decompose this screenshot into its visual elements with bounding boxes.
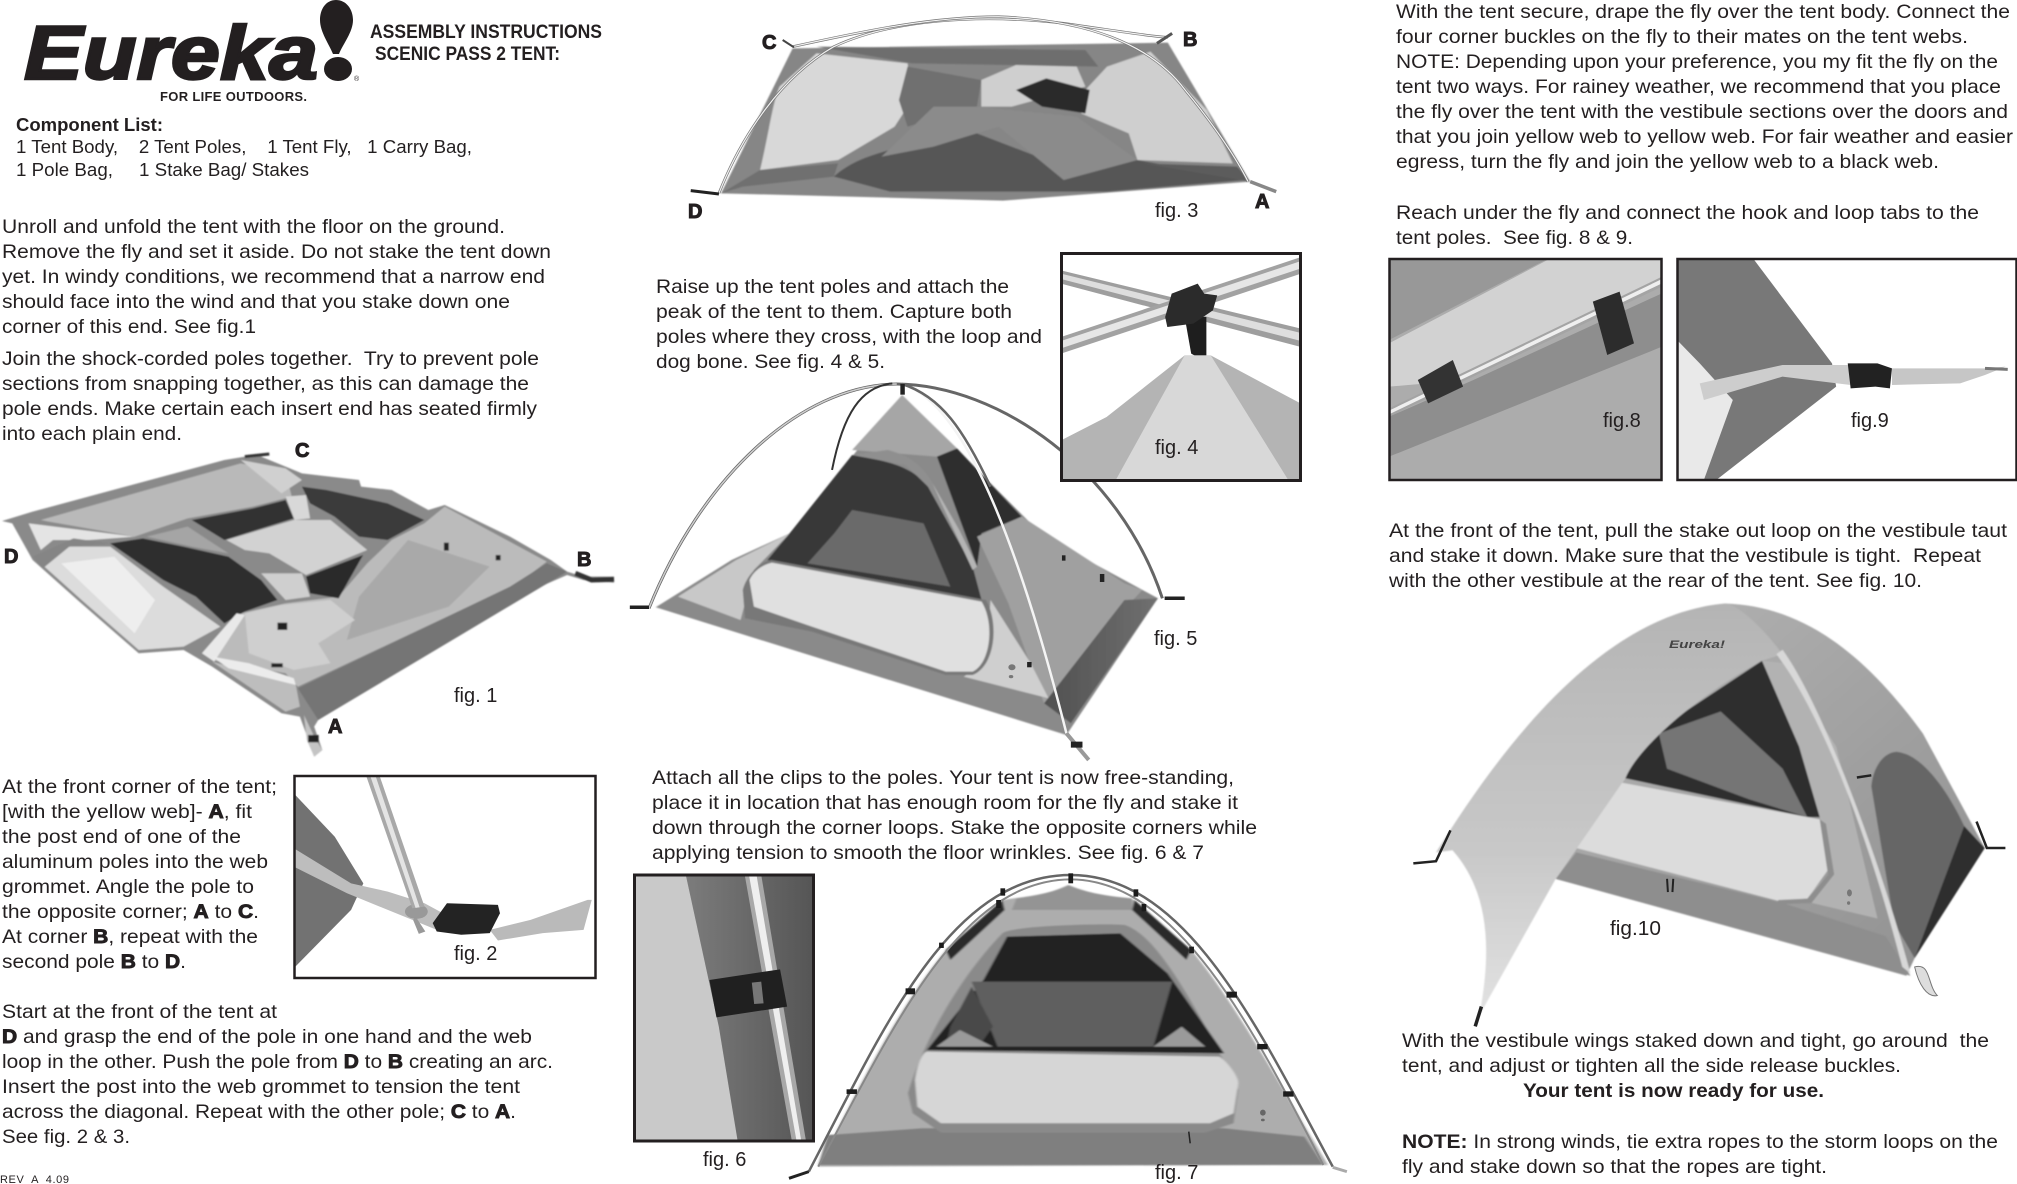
figure 3 corner labels: C — [762, 32, 776, 54]
text: raise up the tent poles: peak of the tent to them. Capture both — [656, 301, 1012, 323]
text: raise up the tent poles: poles where they cross, with the loop and — [656, 326, 1042, 348]
text: vestibule wings: tent, and adjust or tighten all the side release buckles. — [1402, 1055, 1901, 1077]
text: start at the front of the tent: See fig. 2 & 3. — [2, 1126, 130, 1148]
text: front corner of the tent: second pole B to D. — [2, 951, 186, 973]
figure 4 frame — [1062, 254, 1300, 480]
text: raise up the tent poles — [656, 276, 1042, 373]
note: strong winds: NOTE: In strong winds, tie extra ropes to the storm loops on the — [1402, 1131, 1998, 1153]
text: start at the front of the tent — [2, 1001, 553, 1148]
text: attach the clips: down through the corner loops. Stake the opposite corners while — [652, 817, 1257, 839]
component list: Component List: — [16, 115, 163, 135]
caption: fig. 4: fig. 4 — [1155, 437, 1198, 459]
text: front corner of the tent: At corner B, repeat with the — [2, 926, 258, 948]
heading: assembly instructions — [370, 21, 602, 65]
caption: fig. 2: fig. 2 — [454, 943, 497, 965]
figure 1 corner labels — [4, 440, 591, 738]
caption: fig. 10: fig.10 — [1610, 918, 1661, 940]
text: drape the fly: NOTE: Depending upon your preference, you my fit the fly on the — [1396, 51, 1998, 73]
caption: fig. 9: fig.9 — [1851, 410, 1889, 432]
text: drape the fly: that you join yellow web to yellow web. For fair weather and easier — [1396, 126, 2014, 148]
figure 3: tent body with poles arched — [691, 17, 1276, 201]
text: vestibule wings: With the vestibule wings staked down and tight, go around the — [1402, 1030, 1989, 1052]
figure 9: buckle and web — [1678, 260, 2008, 479]
text: stake out loop: At the front of the tent, pull the stake out loop on the vestibule taut — [1389, 520, 2008, 542]
caption: fig. 3: fig. 3 — [1155, 200, 1198, 222]
figure 6: clip on pole — [636, 876, 812, 1140]
logo: Eureka: FOR LIFE OUTDOORS. — [160, 89, 307, 104]
text: drape the fly: tent two ways. For rainey weather, we recommend that you place — [1396, 76, 2001, 98]
text: start at the front of the tent: D and grasp the end of the pole in one hand and the web — [2, 1026, 532, 1048]
text: vestibule wings: Your tent is now ready for use. — [1523, 1080, 1824, 1102]
text: drape the fly: egress, turn the fly and join the yellow web to a black web. — [1396, 151, 1939, 173]
figure 8: hook and loop tabs on pole — [1390, 260, 1660, 479]
note: strong winds: fly and stake down so that the ropes are tight. — [1402, 1156, 1827, 1178]
figure 9 frame — [1678, 259, 2016, 480]
text: join the poles: into each plain end. — [2, 423, 182, 445]
component list — [16, 115, 472, 180]
logo: Eureka: Eureka — [24, 11, 318, 96]
text: stake out loop: with the other vestibule at the rear of the tent. See fig. 10. — [1388, 570, 1922, 592]
text: front corner of the tent: At the front corner of the tent; — [2, 776, 277, 798]
figure 7: free-standing tent — [789, 873, 1347, 1178]
text: front corner of the tent: the post end of one of the — [2, 826, 241, 848]
figure 3 corner labels: B — [1183, 29, 1197, 51]
figure 8 frame — [1390, 259, 1662, 480]
figure 1 corner labels: C — [295, 440, 309, 462]
text: drape the fly: the fly over the tent with the vestibule sections over the doors and — [1396, 101, 2008, 123]
text: drape the fly — [1396, 1, 2014, 173]
figure 1 corner labels: D — [4, 546, 18, 568]
heading: assembly instructions: ASSEMBLY INSTRUCTIONS — [370, 21, 602, 43]
component list: 1 Pole Bag, 1 Stake Bag/ Stakes — [16, 160, 309, 180]
heading: assembly instructions: SCENIC PASS 2 TENT: — [375, 43, 560, 65]
logo: Eureka — [24, 0, 360, 104]
figure 2: pole in web grommet — [296, 777, 592, 966]
label on fly: Eureka: Eureka! — [1669, 639, 1725, 651]
text: attach the clips: applying tension to smooth the floor wrinkles. See fig. 6 & 7 — [652, 842, 1204, 864]
figure 3 corner labels — [688, 29, 1269, 223]
text: join the poles: pole ends. Make certain each insert end has seated firmly — [2, 398, 537, 420]
text: start at the front of the tent: Start at the front of the tent at — [2, 1001, 278, 1023]
figure 4: poles captured where they cross — [1063, 258, 1299, 479]
text: join the poles: sections from snapping together, as this can damage the — [2, 373, 529, 395]
text: front corner of the tent: [with the yellow web]- A, fit — [2, 801, 253, 823]
text: front corner of the tent: grommet. Angle the pole to — [2, 876, 254, 898]
figure 1 corner labels: A — [328, 716, 342, 738]
caption: fig. 1: fig. 1 — [454, 685, 497, 707]
text: unroll the tent: should face into the wind and that you stake down one — [2, 291, 510, 313]
figure 1: tent laid flat — [2, 454, 614, 757]
text: attach the clips: Attach all the clips to the poles. Your tent is now free-standing, — [652, 767, 1234, 789]
figure 1 corner labels: B — [577, 549, 591, 571]
text: raise up the tent poles: dog bone. See fig. 4 & 5. — [656, 351, 885, 373]
text: start at the front of the tent: loop in the other. Push the pole from D to B creating an arc. — [2, 1051, 553, 1073]
logo: Eureka: ® — [354, 75, 360, 83]
text: drape the fly: With the tent secure, drape the fly over the tent body. Connect the — [1396, 1, 2010, 23]
text: reach under the fly: Reach under the fly and connect the hook and loop tabs to the — [1396, 202, 1979, 224]
text: vestibule wings — [1402, 1030, 1989, 1102]
text: front corner of the tent: the opposite corner; A to C. — [2, 901, 259, 923]
text: unroll the tent: Remove the fly and set it aside. Do not stake the tent down — [2, 241, 551, 263]
text: reach under the fly — [1396, 202, 1979, 249]
figure 5: tent body on raised poles — [630, 383, 1185, 760]
figure 3 corner labels: A — [1255, 191, 1269, 213]
text: front corner of the tent: aluminum poles into the web — [2, 851, 268, 873]
text: unroll the tent: yet. In windy conditions, we recommend that a narrow end — [2, 266, 545, 288]
text: drape the fly: four corner buckles on the fly to their mates on the tent webs. — [1396, 26, 1968, 48]
text: unroll the tent: Unroll and unfold the tent with the floor on the ground. — [2, 216, 505, 238]
text: reach under the fly: tent poles. See fig. 8 & 9. — [1396, 227, 1633, 249]
note: strong winds — [1402, 1131, 1998, 1178]
caption: fig. 5: fig. 5 — [1154, 628, 1197, 650]
caption: fig. 8: fig.8 — [1603, 410, 1641, 432]
figure 6 frame — [634, 875, 814, 1141]
text: raise up the tent poles: Raise up the tent poles and attach the — [656, 276, 1009, 298]
figure 2 frame — [294, 776, 596, 978]
text: join the poles: Join the shock-corded poles together. Try to prevent pole — [2, 348, 539, 370]
figure 10: tent with fly and vestibule — [1413, 604, 2005, 1026]
component list: 1 Tent Body, 2 Tent Poles, 1 Tent Fly, 1 Carry Bag, — [16, 137, 472, 157]
caption: fig. 6: fig. 6 — [703, 1149, 746, 1171]
text: attach the clips: place it in location that has enough room for the fly and stake it — [652, 792, 1239, 814]
text: unroll the tent: corner of this end. See fig.1 — [2, 316, 256, 338]
text: front corner of the tent — [2, 776, 277, 973]
figure 3 corner labels: D — [688, 201, 702, 223]
text: start at the front of the tent: across the diagonal. Repeat with the other pole; C to A. — [2, 1101, 516, 1123]
text: start at the front of the tent: Insert the post into the web grommet to tension the tent — [2, 1076, 521, 1098]
text: unroll the tent — [2, 216, 551, 338]
caption: fig. 7: fig. 7 — [1155, 1162, 1198, 1184]
text: stake out loop: and stake it down. Make sure that the vestibule is tight. Repeat — [1389, 545, 1982, 567]
text: attach the clips — [652, 767, 1257, 864]
text: join the poles — [2, 348, 539, 445]
text: stake out loop — [1388, 520, 2008, 592]
